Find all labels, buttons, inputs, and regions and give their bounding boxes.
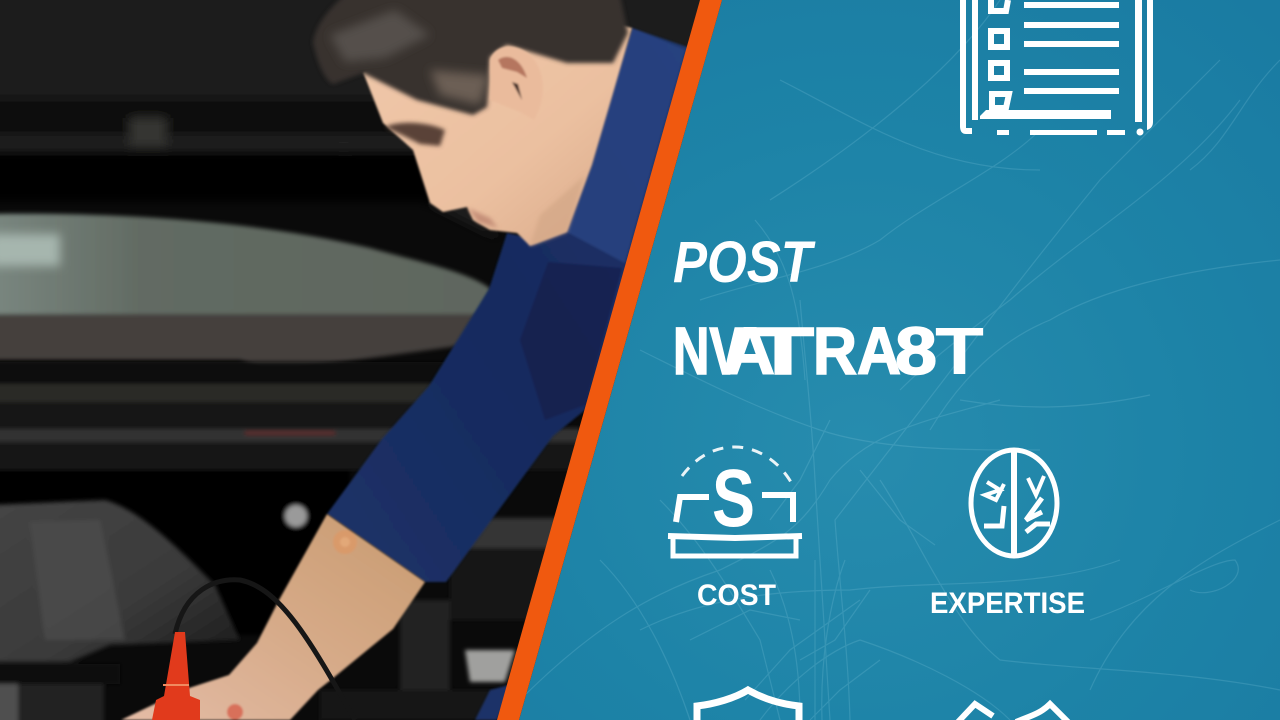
face: [363, 20, 632, 246]
heading: garbled word: RA: [813, 314, 901, 389]
heading: garbled word: A: [725, 314, 775, 389]
hood reflection: [0, 234, 60, 266]
orange test clamp: [152, 632, 200, 720]
car hood surface: [0, 214, 492, 372]
label: expertise: EXPERTISE: [930, 587, 1085, 620]
icon: cost: [668, 447, 802, 558]
heading: garbled word: 8: [895, 314, 937, 389]
forearm and hand: [121, 514, 425, 720]
hair highlight: [330, 10, 430, 62]
shirt torso and sleeve: [327, 28, 690, 720]
orange diagonal divider: [497, 0, 722, 720]
heading: post: POST: [673, 230, 816, 295]
mechanic figure: [121, 0, 690, 720]
heading: garbled word: NV: [673, 314, 743, 389]
checkboxes: [991, 0, 1009, 108]
faint road map lines: [520, 0, 1280, 720]
label: cost: COST: [697, 579, 776, 612]
temple fade: [430, 70, 490, 105]
heading: garbled word: [673, 314, 984, 389]
photo: mechanic working under car hood: [0, 0, 720, 720]
heading: garbled word: T: [935, 314, 984, 389]
icon: checklist: [960, 0, 1153, 136]
nose shadow, eye and mouth: [385, 123, 585, 246]
bottom of clipboard: [980, 110, 1144, 136]
icon: cost: S: [712, 453, 755, 544]
checklist lines: [1024, 2, 1119, 94]
panel: blue map background: [519, 0, 1280, 720]
icon: shield: [697, 690, 799, 720]
test cable: [175, 580, 355, 720]
heading: garbled word: T: [752, 314, 814, 389]
ear: [490, 46, 543, 120]
engine bay upper background: [0, 0, 720, 240]
icon: handshake: [958, 704, 1068, 720]
lower engine bay bands: [0, 362, 580, 720]
hair: [313, 0, 628, 115]
engine cover: [0, 500, 240, 720]
icon: brain: [971, 450, 1057, 556]
